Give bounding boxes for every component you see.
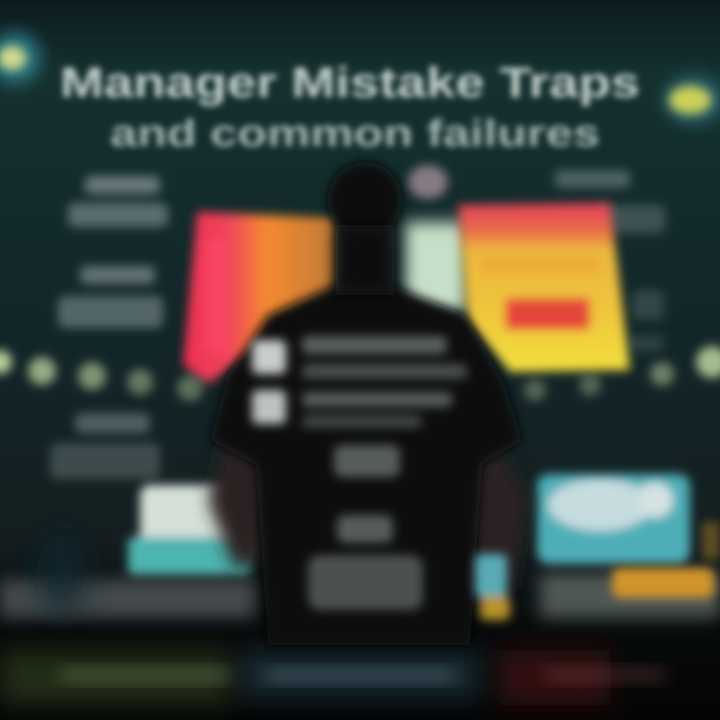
text block: right column	[555, 170, 665, 351]
panel: bottom-right card	[537, 474, 690, 564]
bottom footer colours	[0, 650, 610, 705]
text block: left column	[50, 176, 168, 479]
panel: mint center	[405, 222, 467, 312]
icon: wristband	[475, 554, 510, 620]
neck	[336, 225, 394, 295]
lights row left	[0, 350, 203, 401]
icon: top-left light	[0, 32, 41, 84]
icon: top-right light	[664, 76, 720, 124]
head	[328, 162, 402, 238]
icon: small pink mark above panel	[408, 165, 448, 199]
panel: yellow chart	[458, 203, 630, 372]
title: Manager Mistake Traps	[60, 59, 640, 107]
lights row right	[524, 346, 720, 401]
title	[60, 59, 640, 155]
torso	[210, 285, 522, 645]
person silhouette	[208, 162, 528, 645]
label: orange tag	[612, 568, 714, 598]
shirt text	[252, 336, 467, 610]
title: and common failures	[110, 113, 600, 155]
arms	[208, 440, 270, 570]
icon: right edge mark	[702, 522, 720, 560]
panel: bottom-left card	[128, 485, 250, 575]
footer text	[60, 668, 665, 682]
bottom strip	[0, 574, 720, 618]
left shoulder figure	[36, 535, 88, 615]
panel: red-orange chart	[183, 212, 335, 384]
